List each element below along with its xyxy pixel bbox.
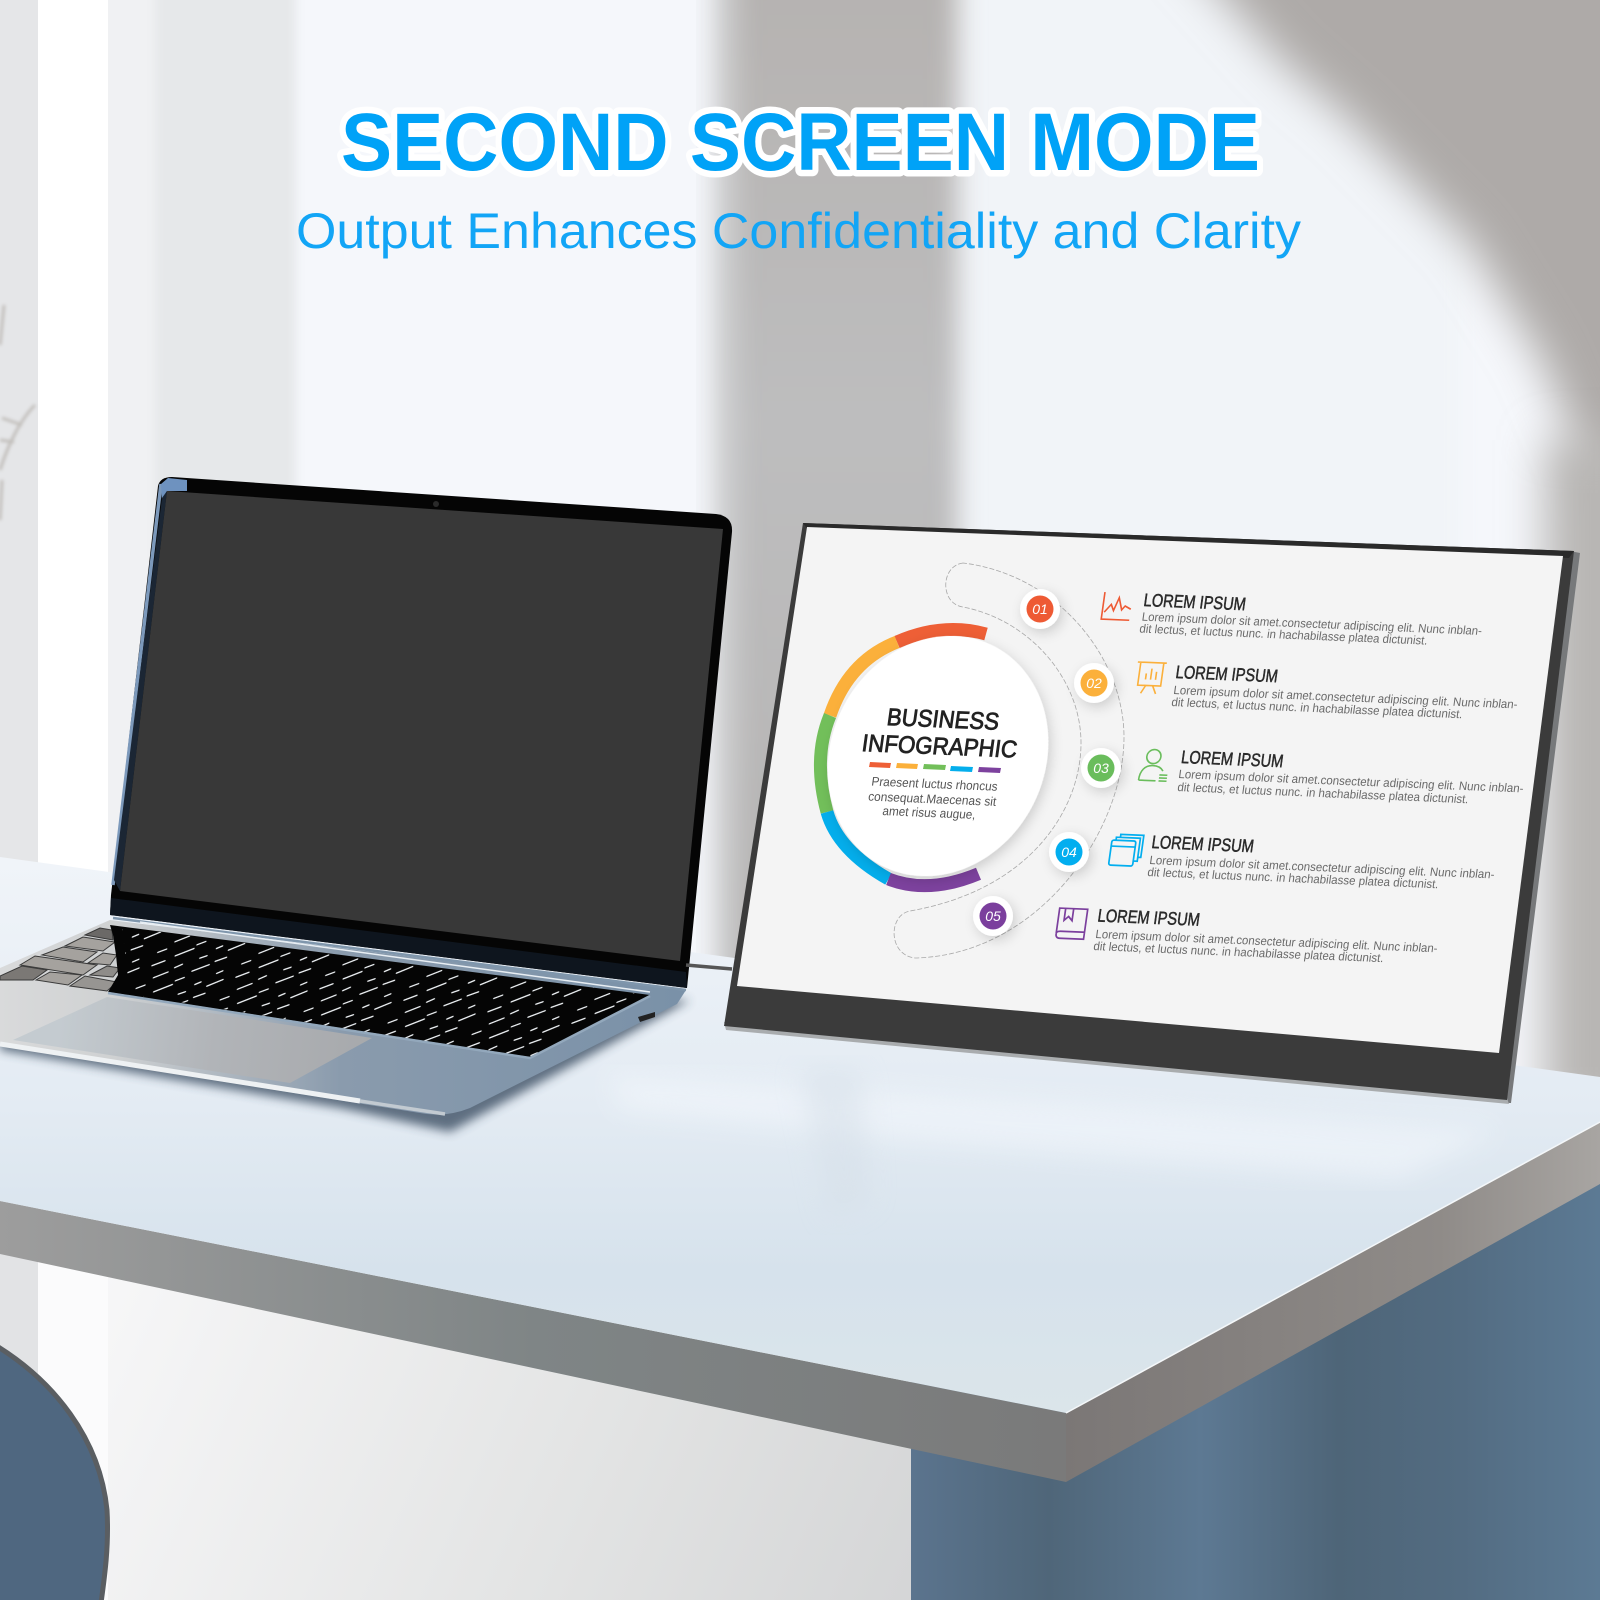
floor xyxy=(0,1180,911,1600)
item 1 text: Lorem ipsum dolor sit amet.consectetur adipiscing elit. Nunc inblan- xyxy=(1141,610,1483,638)
front edge highlight xyxy=(0,1044,360,1101)
item 5 text: dit lectus, et luctus nunc. in hachabilasse platea dictunist. xyxy=(1093,939,1385,965)
item 2 text: LOREM IPSUM xyxy=(1174,662,1279,686)
hinge highlight xyxy=(113,918,686,990)
laptop xyxy=(0,477,732,1115)
color bars xyxy=(869,762,1001,773)
monitor bezel xyxy=(724,523,1574,1100)
center description: consequat.Maecenas sit xyxy=(867,790,998,809)
table xyxy=(0,857,1600,1482)
icon: book xyxy=(1056,908,1088,939)
keyboard rim xyxy=(108,993,650,1058)
lid left edge xyxy=(113,484,161,885)
item 3 text xyxy=(1177,747,1525,806)
monitor silver edge xyxy=(1504,551,1580,1103)
title: SECOND SCREEN MODE xyxy=(341,97,1260,188)
laptop shadow xyxy=(0,1000,690,1132)
chair foreground xyxy=(0,1342,108,1600)
item 3 text: Lorem ipsum dolor sit amet.consectetur adipiscing elit. Nunc inblan- xyxy=(1178,767,1525,795)
dashed track xyxy=(894,563,1124,958)
monitor screen xyxy=(737,527,1563,1053)
keyboard xyxy=(108,925,650,1057)
item 5 text: Lorem ipsum dolor sit amet.consectetur adipiscing elit. Nunc inblan- xyxy=(1095,927,1439,955)
laptop screen xyxy=(120,491,723,961)
center heading xyxy=(860,704,1019,763)
subtitle: Output Enhances Confidentiality and Clarity xyxy=(296,203,1301,259)
item 4 text xyxy=(1147,832,1496,891)
item 2 text xyxy=(1171,662,1519,721)
item 3 text: LOREM IPSUM xyxy=(1180,747,1285,771)
badge 02: 02 xyxy=(1086,675,1102,691)
badge 01 xyxy=(1020,589,1060,629)
center description xyxy=(867,775,999,822)
badge 05: 05 xyxy=(985,908,1001,924)
center heading: INFOGRAPHIC xyxy=(860,730,1019,763)
item 5 text xyxy=(1093,906,1439,965)
item 5 text: LOREM IPSUM xyxy=(1096,906,1201,930)
webcam xyxy=(433,501,439,507)
plant xyxy=(0,305,35,520)
item 4 text: LOREM IPSUM xyxy=(1150,832,1255,856)
left keys xyxy=(0,928,120,991)
badge 02 xyxy=(1074,663,1114,703)
usb port xyxy=(638,1012,655,1022)
badge 04 xyxy=(1049,832,1089,872)
item 4 text: Lorem ipsum dolor sit amet.consectetur adipiscing elit. Nunc inblan- xyxy=(1149,853,1496,881)
item 2 text: Lorem ipsum dolor sit amet.consectetur adipiscing elit. Nunc inblan- xyxy=(1173,683,1519,711)
donut ring xyxy=(820,630,986,886)
portable monitor xyxy=(724,523,1580,1104)
center description: Praesent luctus rhoncus xyxy=(871,775,999,794)
center circle xyxy=(812,631,1064,881)
laptop base xyxy=(0,920,686,1115)
monitor underside xyxy=(724,1022,1509,1104)
badge 04: 04 xyxy=(1061,844,1077,860)
icon: presentation board xyxy=(1134,662,1167,694)
item 2 text: dit lectus, et luctus nunc. in hachabilasse platea dictunist. xyxy=(1171,695,1464,721)
icon: line chart xyxy=(1101,592,1133,620)
icon: person xyxy=(1139,749,1171,781)
badge 03 xyxy=(1081,748,1121,788)
item 1 text xyxy=(1139,590,1483,648)
blue chair behind table xyxy=(911,1100,1600,1600)
lid xyxy=(110,477,732,988)
badge 03: 03 xyxy=(1093,760,1109,776)
item 1 text: dit lectus, et luctus nunc. in hachabilasse platea dictunist. xyxy=(1139,622,1429,648)
cable xyxy=(686,965,732,969)
lid lower band xyxy=(110,898,687,988)
item 1 text: LOREM IPSUM xyxy=(1142,590,1247,614)
center description: amet risus augue, xyxy=(882,804,977,822)
trackpad xyxy=(13,997,372,1083)
center heading: BUSINESS xyxy=(885,704,1001,736)
badge 01: 01 xyxy=(1032,601,1048,617)
item 3 text: dit lectus, et luctus nunc. in hachabilasse platea dictunist. xyxy=(1177,780,1470,806)
item 4 text: dit lectus, et luctus nunc. in hachabilasse platea dictunist. xyxy=(1147,865,1440,891)
badge 05 xyxy=(973,896,1013,936)
icon: stacked cards xyxy=(1109,834,1144,866)
